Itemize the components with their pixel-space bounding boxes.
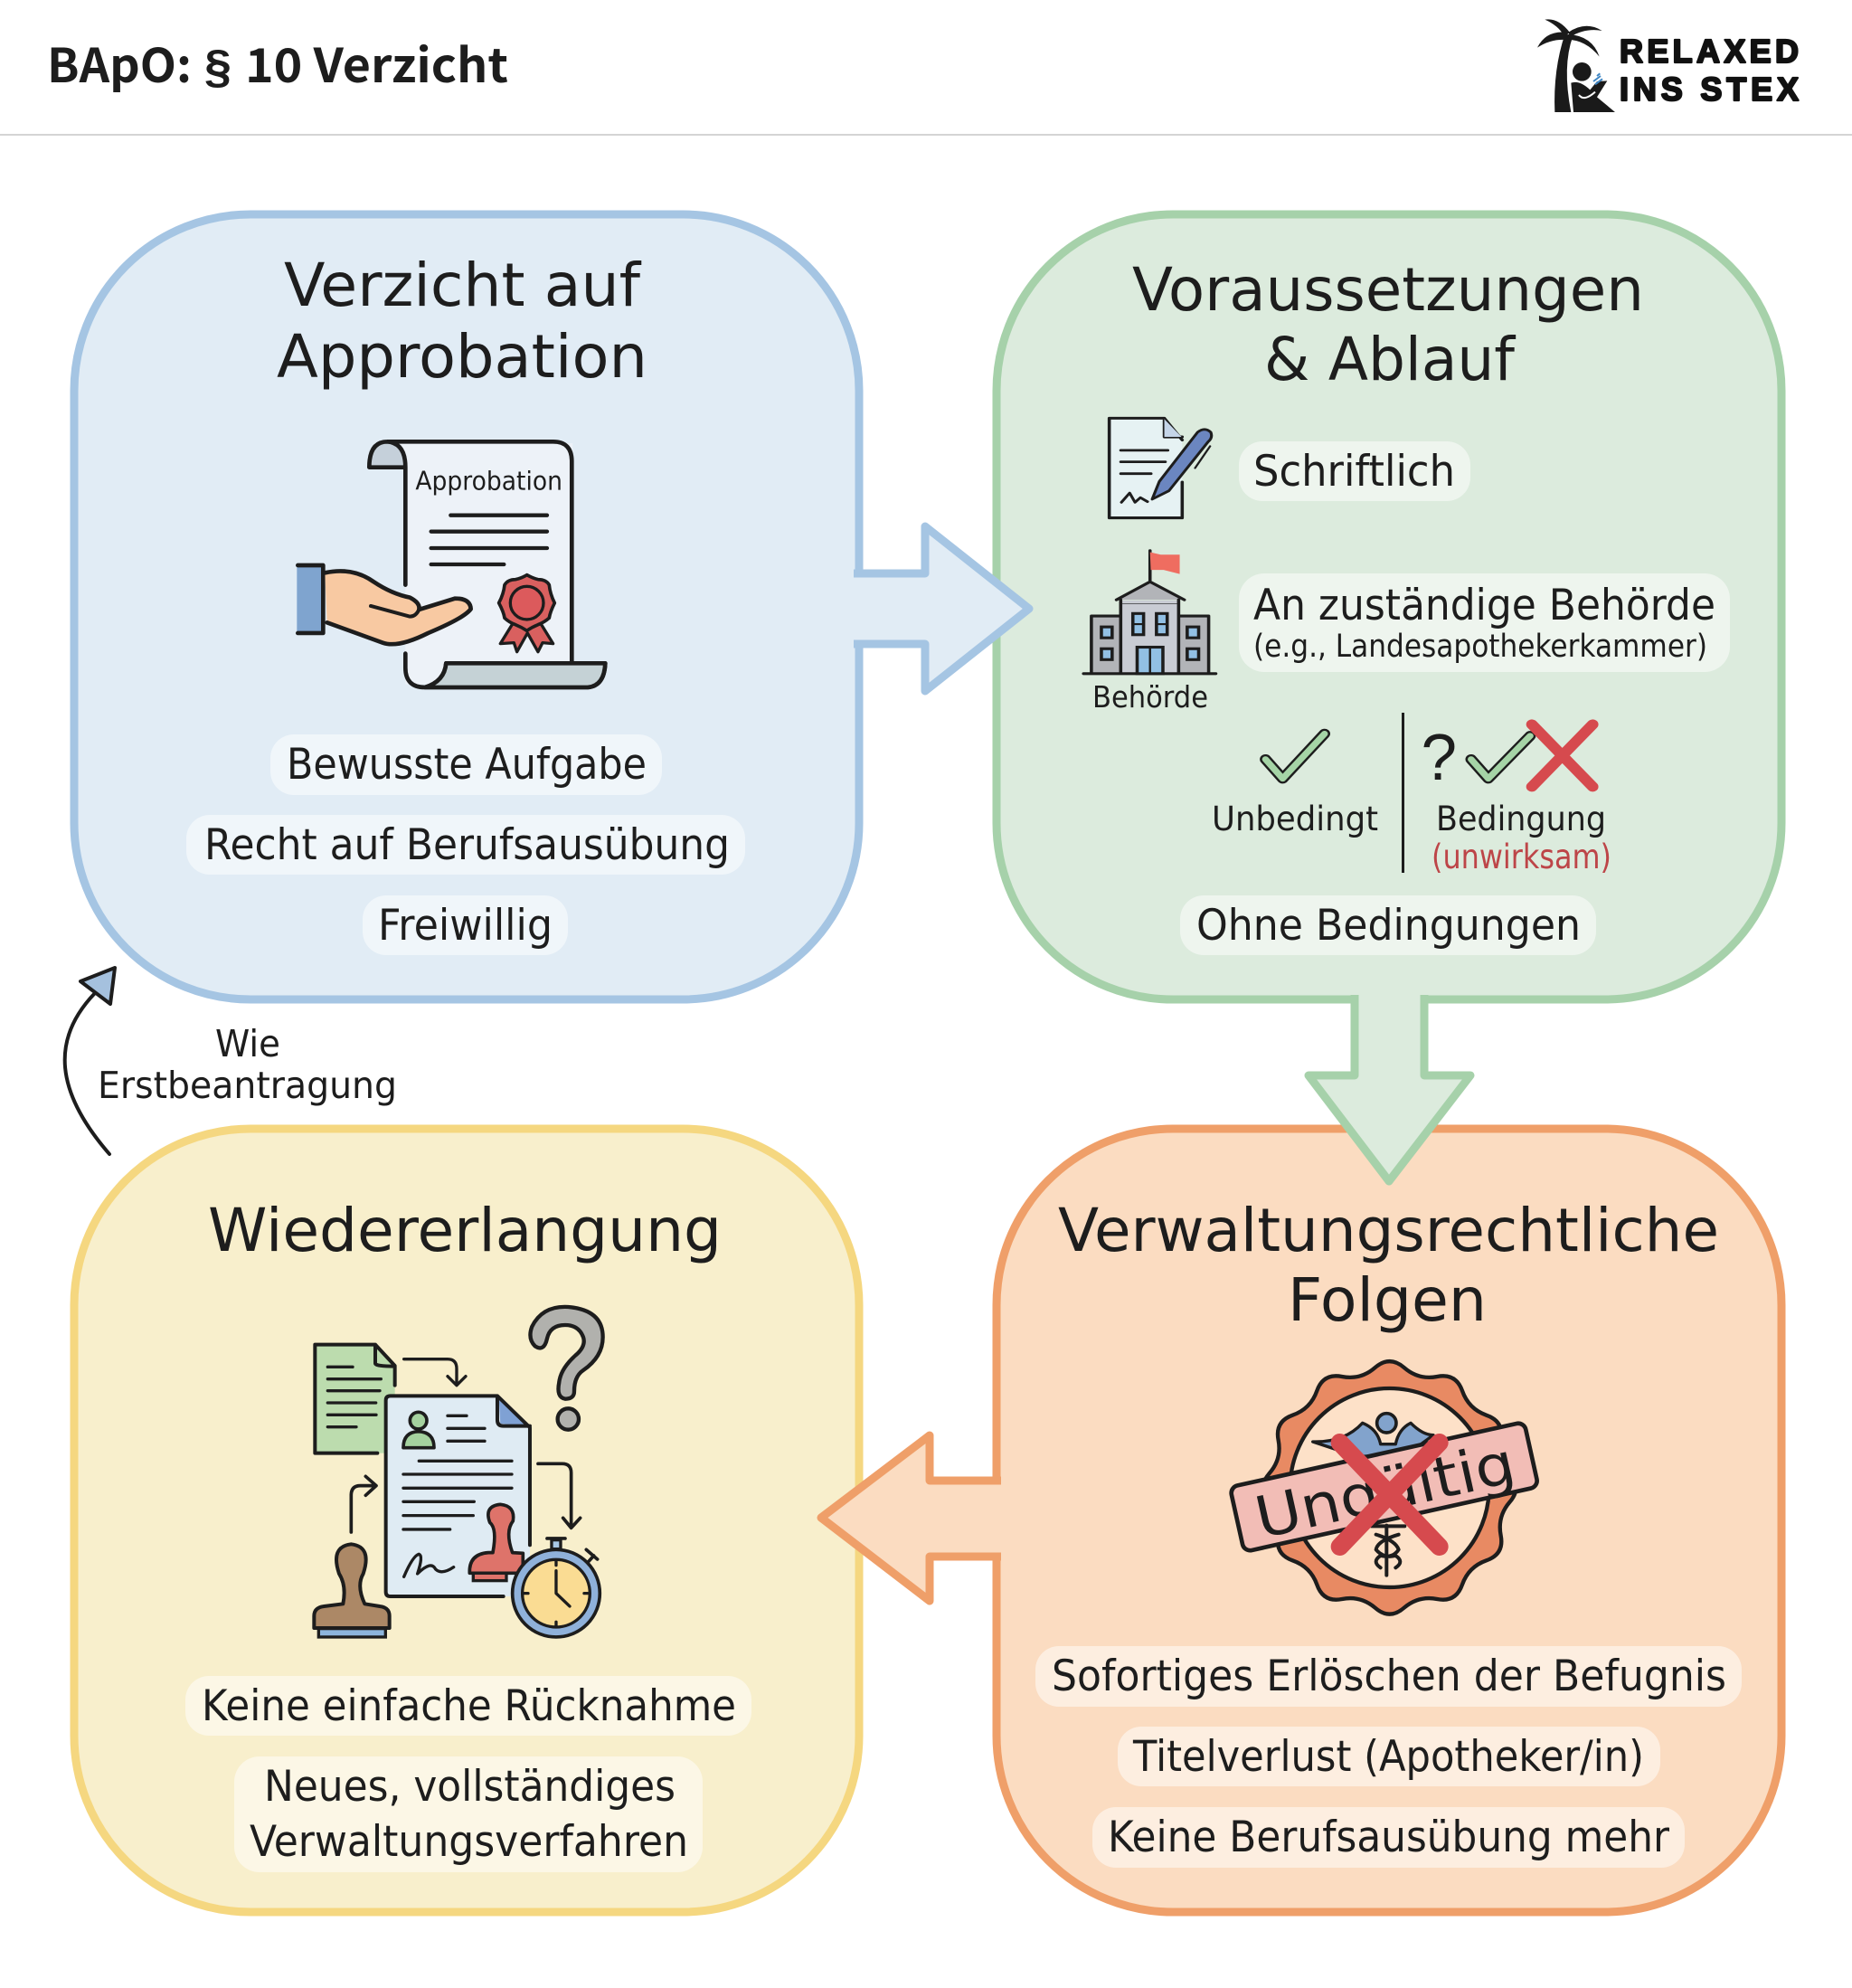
icon: documents, stamps, stopwatch	[314, 1307, 603, 1637]
heading	[1058, 1196, 1719, 1335]
label: Wie Erstbeantragung: Wie	[215, 1022, 280, 1065]
pill: Neues, vollständiges Verwaltungsverfahren	[234, 1756, 703, 1872]
pill: Titelverlust: Titelverlust (Apotheker/in)	[1132, 1732, 1644, 1782]
logo: INS STEX	[1620, 71, 1799, 108]
header bar	[0, 19, 1852, 136]
arrow: blue to green	[854, 526, 1029, 691]
panel: Voraussetzungen & Ablauf	[997, 214, 1781, 999]
pill: An zuständige Behörde	[1239, 573, 1730, 672]
pill: An zuständige Behörde: (e.g., Landesapothekerkammer)	[1253, 629, 1707, 665]
heading: & Ablauf	[1264, 325, 1517, 394]
heading: Voraussetzungen	[1132, 255, 1644, 325]
logo	[1537, 19, 1799, 112]
arrow: orange to yellow	[821, 1435, 1001, 1601]
heading	[277, 251, 647, 392]
label: Bedingung: Bedingung	[1436, 800, 1606, 838]
heading: Verzicht auf	[284, 251, 642, 320]
icon: authority building	[1083, 551, 1215, 674]
heading: Verwaltungsrechtliche	[1058, 1196, 1719, 1265]
panel: Verzicht auf Approbation	[74, 214, 859, 999]
icon: document with pen	[1110, 418, 1212, 518]
label: Wie Erstbeantragung	[98, 1022, 397, 1107]
heading: Folgen	[1288, 1265, 1487, 1335]
pill: Sofortiges Erlöschen der Befugnis: Sofortiges Erlöschen der Befugnis	[1052, 1652, 1726, 1701]
icon: invalid seal: Ungültig	[1249, 1429, 1521, 1552]
heading	[1132, 255, 1644, 394]
icon: question, check and cross: ?	[1421, 722, 1457, 794]
pill: Schriftlich: Schriftlich	[1253, 447, 1455, 497]
icon: hand offering certificate: Approbation	[415, 466, 562, 496]
label: Behörde: Behörde	[1092, 679, 1208, 715]
icon: invalid seal	[1230, 1361, 1539, 1614]
pill: Keine einfache Rücknahme: Keine einfache Rücknahme	[202, 1681, 736, 1731]
pill: Neues, vollständiges Verwaltungsverfahren: Verwaltungsverfahren	[250, 1817, 688, 1867]
pill: An zuständige Behörde: An zuständige Behörde	[1253, 581, 1715, 630]
pill: Neues, vollständiges Verwaltungsverfahren: Neues, vollständiges	[264, 1762, 676, 1812]
icon: check mark	[1265, 734, 1325, 779]
pill: Freiwillig: Freiwillig	[378, 901, 553, 951]
pill: Keine Berufsausübung mehr: Keine Berufsausübung mehr	[1108, 1813, 1670, 1862]
icon: question, check and cross	[1421, 722, 1592, 794]
title	[47, 28, 508, 96]
heading: Approbation	[277, 322, 647, 392]
icon: hand offering certificate	[297, 441, 605, 687]
label: unwirksam: (unwirksam)	[1432, 838, 1611, 876]
title: BApO:	[47, 28, 192, 96]
pill: Recht auf Berufsausübung: Recht auf Berufsausübung	[204, 820, 730, 870]
title: 10 Verzicht	[245, 28, 508, 96]
panel: Wiedererlangung	[74, 1129, 859, 1912]
curved arrow: back to approbation	[65, 968, 115, 1154]
pill: Bewusste Aufgabe: Bewusste Aufgabe	[287, 740, 647, 790]
title: §	[204, 41, 232, 93]
panel: Verwaltungsrechtliche Folgen	[997, 1129, 1781, 1912]
pill: Ohne Bedingungen: Ohne Bedingungen	[1196, 901, 1581, 951]
arrow: green to orange	[1309, 995, 1470, 1181]
label: Unbedingt: Unbedingt	[1212, 800, 1378, 838]
label: Wie Erstbeantragung: Erstbeantragung	[98, 1064, 397, 1107]
heading: Wiedererlangung	[208, 1196, 722, 1265]
logo: RELAXED	[1620, 33, 1799, 70]
